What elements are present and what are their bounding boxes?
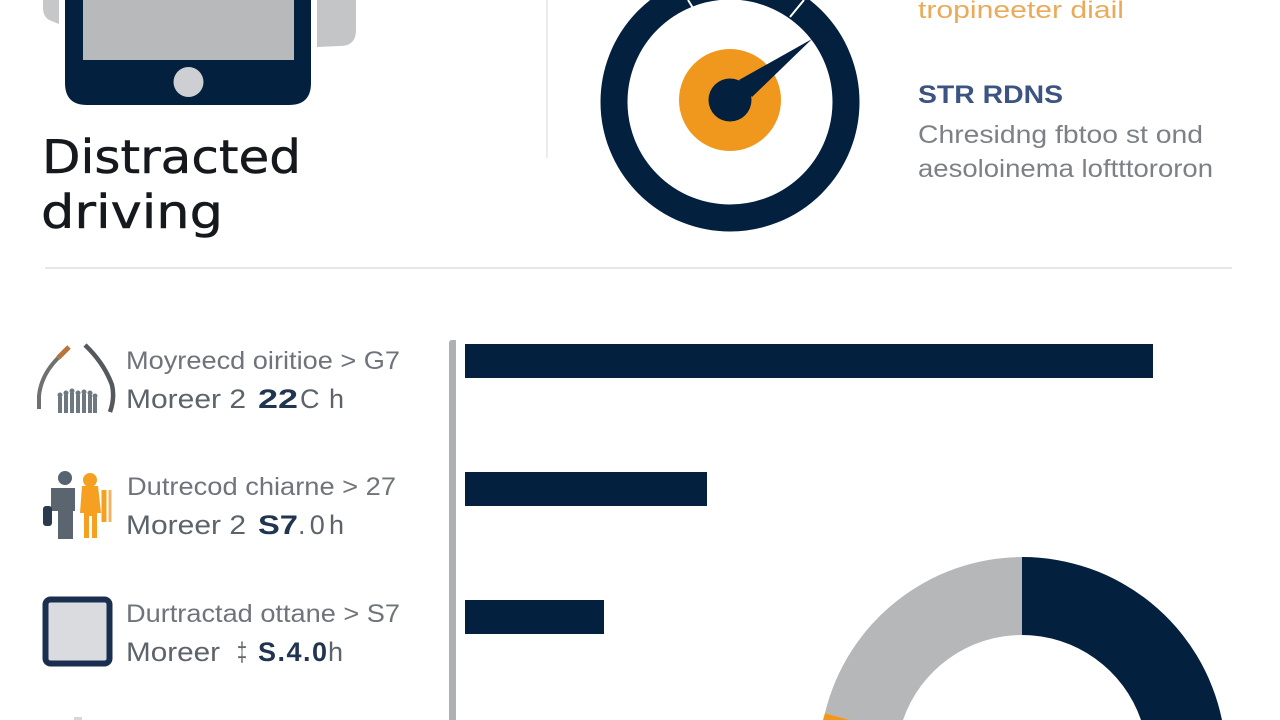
panel: stat list	[39, 345, 400, 720]
row 2 text: S7	[258, 510, 298, 540]
icon: two figures	[43, 471, 110, 539]
row 2 text	[126, 473, 396, 540]
row 3 text: Durtractad ottane > S7	[126, 600, 400, 628]
panel: gauge	[614, 0, 846, 218]
bar 1	[465, 344, 1153, 378]
row 1 text: Moreer 2	[126, 384, 246, 414]
icon: square	[46, 600, 110, 664]
icon: arch with crowd	[39, 345, 113, 413]
panel: gauge text	[918, 0, 1213, 183]
heading: distracted driving	[41, 130, 301, 239]
row 3 text: Moreer	[126, 637, 220, 667]
heading: distracted driving: driving	[41, 185, 223, 239]
row 3 text: ‡	[237, 637, 247, 667]
row 2	[43, 471, 396, 540]
segment: orange	[823, 713, 850, 720]
bar chart	[449, 340, 1153, 720]
row 1 text	[126, 347, 400, 414]
row 2 text: Dutrecod chiarne > 27	[127, 473, 396, 501]
description	[918, 121, 1213, 183]
row 2 text: Moreer 2	[126, 510, 246, 540]
row 3 text: h	[328, 637, 343, 667]
row 1 text: Moyreecd oiritioe > G7	[126, 347, 400, 375]
axis	[449, 340, 456, 720]
donut chart	[823, 557, 1222, 720]
icon: speedometer dial	[614, 0, 846, 218]
segment: navy	[1022, 557, 1222, 720]
row 4 icon fragment	[74, 717, 82, 720]
row 1 text: Ch	[300, 384, 344, 414]
row 3	[46, 600, 400, 667]
row 3 text: S.4.0	[258, 637, 327, 667]
row 1	[39, 345, 400, 414]
panel: distracted driving	[41, 0, 356, 239]
icon: phone	[43, 0, 356, 105]
bar 3	[465, 600, 604, 634]
description: aesoloinema loftttororon	[918, 155, 1213, 183]
row 1 text: 22	[258, 384, 298, 414]
bar 2	[465, 472, 707, 506]
row 2 text: .0h	[298, 510, 344, 540]
description: Chresidng fbtoo st ond	[918, 121, 1203, 149]
heading: distracted driving: Distracted	[42, 130, 301, 184]
segment: grey	[825, 557, 1022, 720]
stat heading: STR RDNS	[918, 81, 1063, 109]
row 3 text	[126, 600, 400, 667]
